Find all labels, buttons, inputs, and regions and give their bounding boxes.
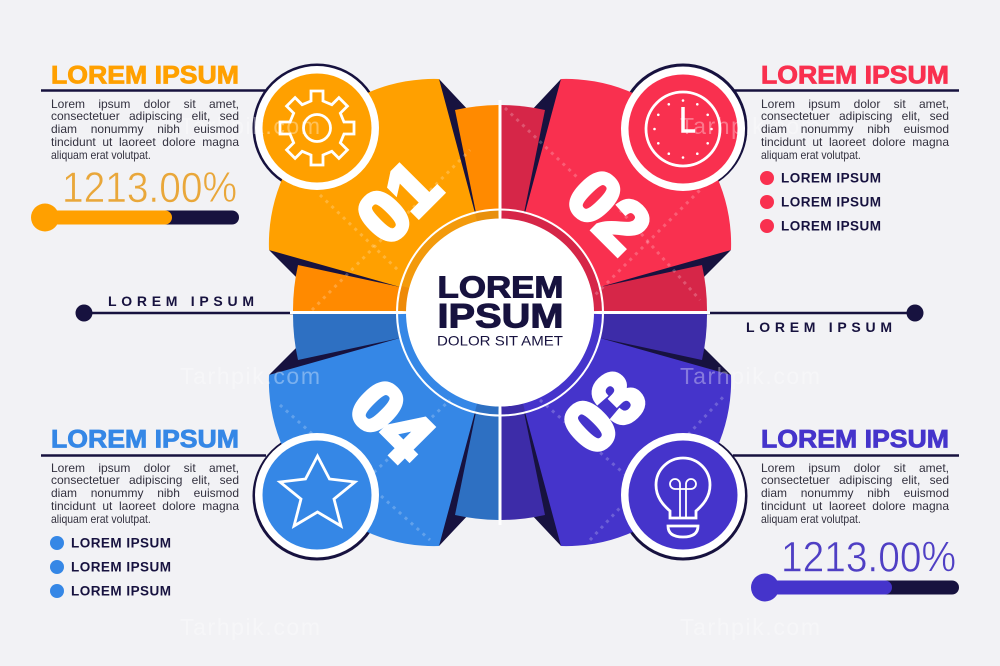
text block 01: Lorem ipsum dolor sit amet,: [51, 96, 239, 110]
heading 01: LOREM IPSUM: [51, 62, 239, 90]
number 01: 01: [342, 146, 455, 259]
text block 04: consectetuer adipiscing elit, sed: [51, 473, 239, 487]
cross dividers: [290, 100, 710, 525]
rule: panel 02: [733, 89, 959, 92]
blade 04: [269, 314, 498, 546]
centre ring segments: [402, 214, 598, 410]
dark outline ring 03: [620, 433, 746, 559]
heading 04: LOREM IPSUM: [51, 426, 239, 454]
watermarks: Tarhpik.com: [180, 614, 320, 640]
text block 01: diam nonummy nibh euismod: [51, 122, 239, 136]
watermarks: Tarhpik.com: [680, 614, 820, 640]
icon: light bulb: [621, 433, 745, 557]
number 04: 04: [335, 365, 448, 478]
centre thin white ring: [397, 210, 603, 416]
watermarks: Tarhpik.com: [680, 113, 820, 139]
text block 01: consectetuer adipiscing elit, sed: [51, 109, 239, 123]
centre circle with title: LOREM: [438, 270, 564, 304]
number 03: 03: [548, 356, 661, 469]
bullet list 04: LOREM IPSUM: [71, 560, 171, 574]
dark outline ring 02: [620, 65, 746, 191]
dark outline ring 04: [254, 433, 380, 559]
text block 03: Lorem ipsum dolor sit amet,: [761, 460, 949, 474]
blade 01: [269, 79, 498, 311]
centre circle with title: [406, 218, 594, 406]
text block 04: tincidunt ut laoreet dolore magna: [51, 499, 239, 513]
right connector line: [705, 304, 924, 322]
text block 04: Lorem ipsum dolor sit amet,: [51, 460, 239, 474]
text block 03: aliquam erat volutpat.: [761, 512, 861, 526]
rule: panel 01: [41, 89, 266, 92]
text block 02: consectetuer adipiscing elit, sed: [761, 109, 949, 123]
text block 04: aliquam erat volutpat.: [51, 512, 151, 526]
bullet list 04: [50, 536, 171, 598]
icon: gear: [255, 66, 379, 190]
progress 01: 1213.00%: [62, 164, 237, 212]
heading 03: LOREM IPSUM: [761, 426, 949, 454]
faint diagonal dotted lines: [280, 108, 725, 540]
progress 03: [751, 534, 959, 602]
bullet list 02: LOREM IPSUM: [781, 218, 881, 234]
right axis label: LOREM IPSUM: [746, 319, 892, 335]
text block 03: [761, 460, 950, 526]
bullet list 04: LOREM IPSUM: [71, 536, 171, 550]
bullet list 02: LOREM IPSUM: [781, 194, 881, 210]
bullet list 02: LOREM IPSUM: [781, 170, 881, 186]
watermarks: Tarhpik.com: [680, 363, 820, 389]
centre circle with title: IPSUM: [438, 298, 564, 336]
rule: panel 04: [41, 454, 266, 457]
left connector line: [76, 304, 295, 322]
blade 03: [502, 314, 731, 546]
dark outline ring 01: [254, 65, 380, 191]
heading 02: LOREM IPSUM: [761, 62, 949, 90]
progress 01: [31, 164, 239, 232]
text block 02: aliquam erat volutpat.: [761, 148, 861, 162]
text block 04: [51, 460, 240, 526]
icon: clock: [621, 67, 745, 191]
text block 02: diam nonummy nibh euismod: [761, 122, 949, 136]
blade 02: [502, 79, 731, 311]
text block 01: aliquam erat volutpat.: [51, 148, 151, 162]
bullet list 02: [760, 170, 881, 234]
text block 04: diam nonummy nibh euismod: [51, 486, 239, 500]
watermarks: Tarhpik.com: [180, 113, 320, 139]
centre circle with title: DOLOR SIT AMET: [437, 332, 563, 348]
text block 01: [51, 96, 240, 162]
text block 01: tincidunt ut laoreet dolore magna: [51, 135, 239, 149]
icon: star: [255, 433, 379, 557]
text block 02: [761, 96, 950, 162]
bullet list 04: LOREM IPSUM: [71, 584, 171, 598]
text block 03: consectetuer adipiscing elit, sed: [761, 473, 949, 487]
text block 02: tincidunt ut laoreet dolore magna: [761, 135, 949, 149]
left axis label: LOREM IPSUM: [108, 293, 254, 309]
text block 03: tincidunt ut laoreet dolore magna: [761, 499, 949, 513]
watermarks: [180, 113, 820, 640]
progress 03: 1213.00%: [781, 534, 956, 582]
number 02: 02: [552, 155, 665, 268]
watermarks: Tarhpik.com: [180, 363, 320, 389]
text block 03: diam nonummy nibh euismod: [761, 486, 949, 500]
rule: panel 03: [733, 454, 959, 457]
text block 02: Lorem ipsum dolor sit amet,: [761, 96, 949, 110]
